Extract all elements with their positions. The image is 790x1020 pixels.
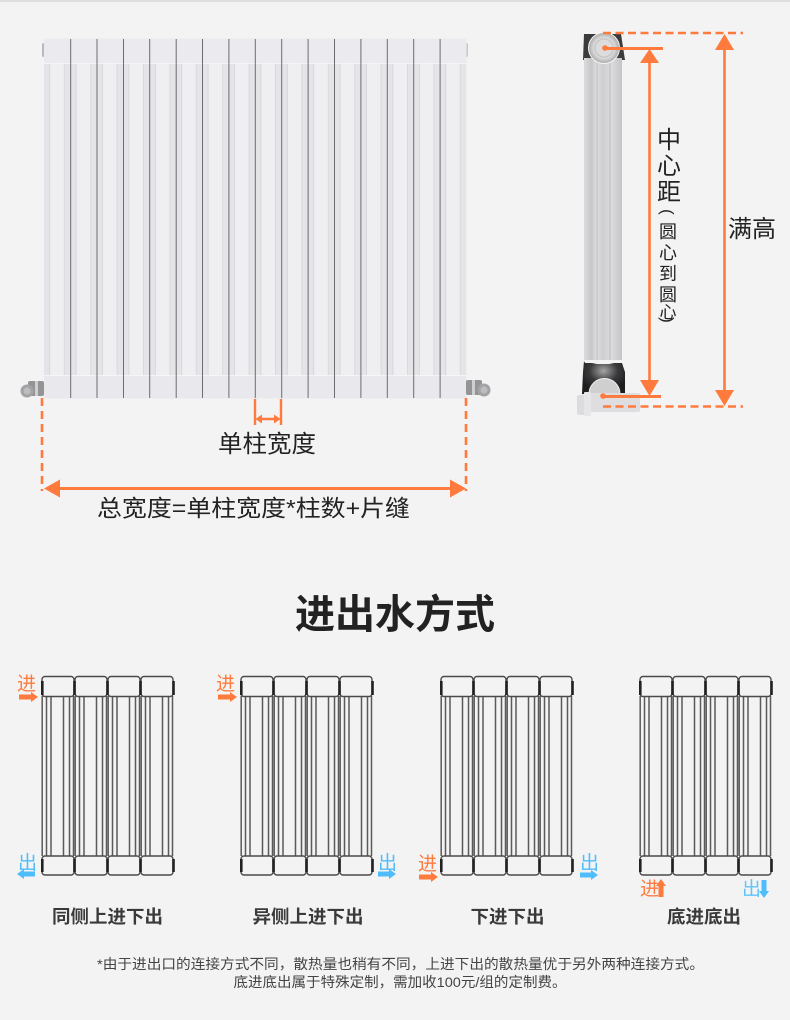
label: circle to circle note: 心: [659, 243, 677, 263]
full height dimension: [603, 33, 743, 406]
center distance dimension: [600, 45, 663, 399]
outlet marker: [742, 878, 769, 900]
diagram: same side top in, bottom out: [17, 673, 174, 879]
inlet marker: 进: [418, 853, 437, 875]
caption: opposite side: 异侧上进下出: [252, 907, 364, 927]
left valve: [20, 381, 44, 398]
label: circle to circle note: 心: [660, 303, 676, 322]
diagram: underside in, underside out: [640, 676, 772, 900]
label: center distance: 心: [657, 153, 681, 180]
label: center distance: 中: [657, 127, 681, 154]
inlet marker: [640, 878, 666, 900]
bottom fitting: [589, 378, 620, 394]
inlet marker: [418, 853, 438, 882]
inlet marker: 进: [216, 673, 235, 695]
label: full height: 满高: [728, 216, 776, 243]
outlet marker: 出: [580, 852, 599, 874]
total width dimension: [42, 398, 466, 498]
inlet marker: 进: [17, 673, 36, 695]
title: 进出水方式: [295, 593, 495, 637]
inlet marker: [216, 673, 237, 702]
label: circle to circle note: 到: [659, 264, 677, 284]
label: single column width: 单柱宽度: [218, 431, 316, 458]
label: center distance: 距: [657, 179, 681, 206]
footnote: 底进底出属于特殊定制，需加收100元/组的定制费。: [234, 974, 566, 990]
label: center distance: [657, 127, 681, 206]
outlet marker: 出: [18, 852, 37, 874]
outlet marker: 出: [742, 878, 761, 900]
diagram: opposite side top in, bottom out: [216, 673, 397, 879]
inlet marker: 进: [640, 878, 659, 900]
label: circle to circle note: ): [658, 317, 677, 323]
right valve: [466, 380, 490, 396]
diagram: bottom in, bottom out: [418, 676, 599, 882]
top fitting: [588, 32, 620, 64]
outlet marker: 出: [378, 852, 397, 874]
label: circle to circle note: [658, 209, 677, 323]
radiator front view: [20, 38, 490, 398]
label: circle to circle note: 圆: [659, 285, 677, 305]
footnote: *由于进出口的连接方式不同，散热量也稍有不同，上进下出的散热量优于另外两种连接方式。: [97, 956, 704, 972]
label: circle to circle note: 圆: [659, 222, 677, 242]
footnote: [97, 956, 704, 990]
inlet marker: [17, 673, 38, 702]
label: total width formula: 总宽度=单柱宽度*柱数+片缝: [97, 495, 410, 521]
caption: same side: 同侧上进下出: [52, 907, 163, 927]
single column width dimension: [255, 399, 281, 425]
caption: underside: 底进底出: [667, 906, 741, 927]
radiator side view: [577, 32, 640, 416]
caption: bottom in bottom out: 下进下出: [470, 907, 544, 927]
label: circle to circle note: (: [658, 209, 677, 215]
